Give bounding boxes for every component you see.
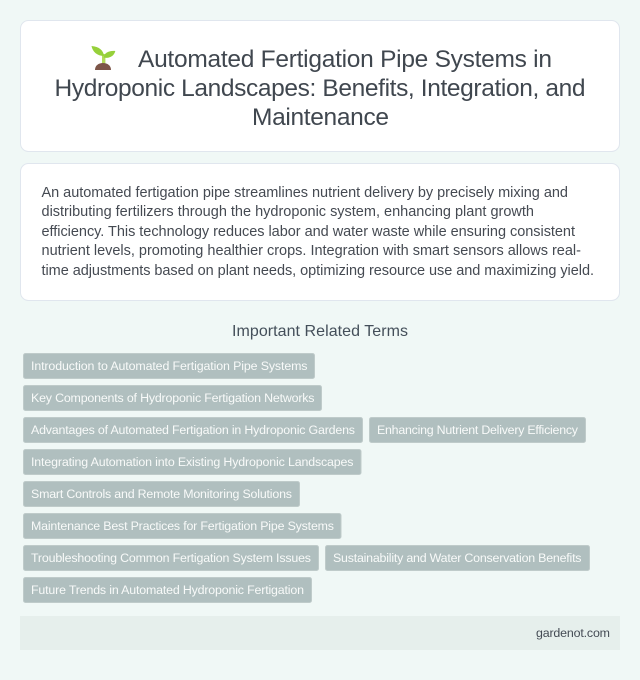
tag [24,450,361,474]
heading: related terms: Important Related Terms [232,323,408,340]
tag: Troubleshooting Common Fertigation System Issues [31,551,311,565]
tag: Sustainability and Water Conservation Benefits [333,551,582,565]
tag: Enhancing Nutrient Delivery Efficiency [377,423,579,437]
tag [24,418,362,442]
panel: description [20,164,620,300]
tag: Advantages of Automated Fertigation in Hydroponic Gardens [31,423,355,437]
tag: Maintenance Best Practices for Fertigation Pipe Systems [31,519,334,533]
tag: Integrating Automation into Existing Hydroponic Landscapes [31,455,354,469]
description text: nutrient levels, promoting healthier crops. Integration with smart sensors allows real- [42,243,581,259]
title: Hydroponic Landscapes: Benefits, Integration, and [54,75,586,102]
title: Automated Fertigation Pipe Systems in [138,46,552,73]
description text: distributing fertilizers through the hydroponic system, enhancing plant growth [42,204,534,220]
tag: Future Trends in Automated Hydroponic Fertigation [31,583,304,597]
tag [370,418,586,442]
footer source text: gardenot.com [536,626,610,640]
tag [24,578,312,602]
tag [24,482,300,506]
description text: An automated fertigation pipe streamlines nutrient delivery by precisely mixing and [42,185,568,201]
panel: title card [20,20,620,152]
tag [24,514,341,538]
tag: Introduction to Automated Fertigation Pipe Systems [31,359,308,373]
description text [42,185,594,279]
icon: sprout [92,46,115,70]
tag: Smart Controls and Remote Monitoring Solutions [31,487,292,501]
title [54,46,586,131]
description text: time adjustments based on plant needs, optimizing resource use and maximizing yield. [42,263,594,279]
tag [24,354,314,378]
description text: efficiency. This technology reduces labor and water waste while ensuring consistent [42,224,575,240]
tag [24,546,318,570]
tag: Key Components of Hydroponic Fertigation Networks [31,391,314,405]
tag [24,386,322,410]
tag [326,546,590,570]
title: Maintenance [252,104,389,131]
footer [20,616,620,650]
panel: term tags [24,354,590,602]
